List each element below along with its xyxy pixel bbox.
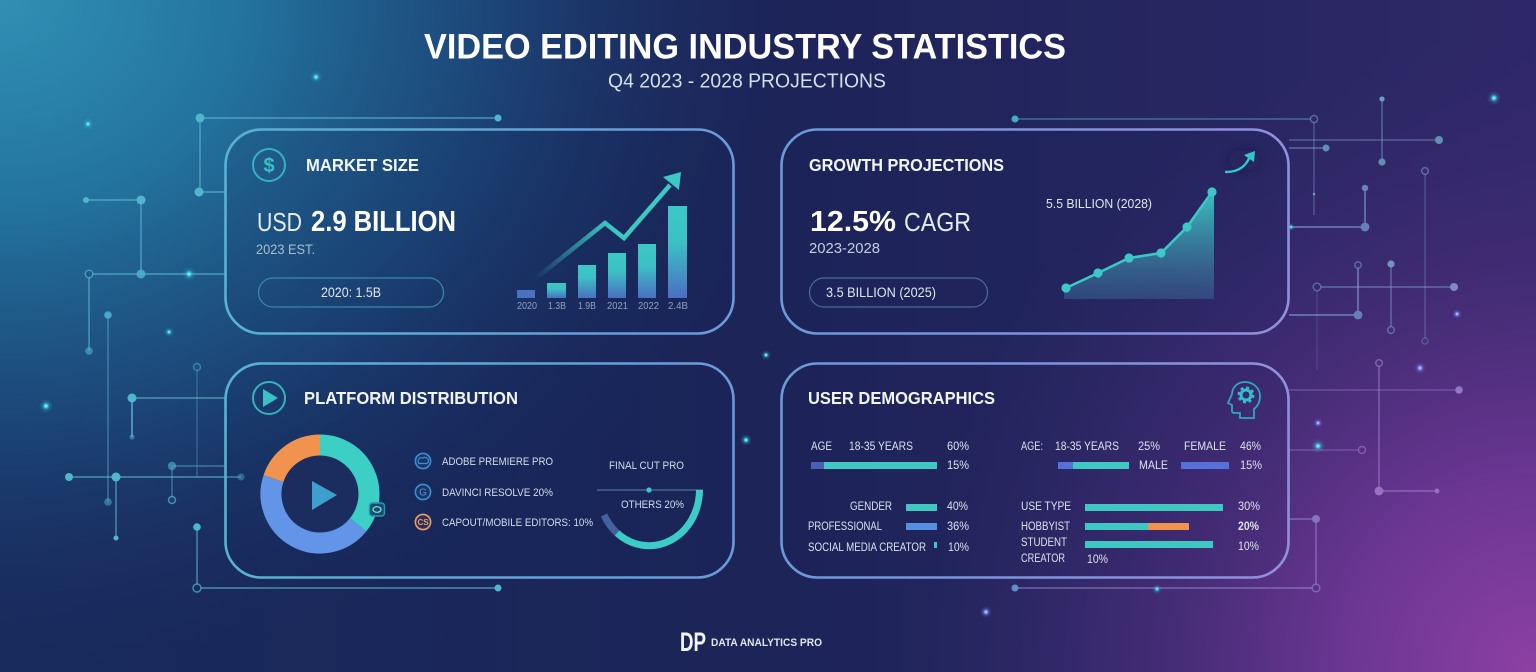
icon: head with gear (1228, 382, 1260, 418)
pill: 2020 value (258, 278, 444, 307)
legend: platforms: ADOBE PREMIERE PRO (442, 456, 553, 468)
bars: age, female and male: 46% (1240, 441, 1261, 453)
bars: use type: 10% (1087, 554, 1108, 566)
icon: dollar: $ (263, 155, 275, 177)
bars: age, female and male: 25% (1138, 441, 1160, 453)
big figure: 12.5% CAGR: 12.5% (810, 206, 896, 238)
panel: user demographics (782, 364, 1288, 578)
pill: 2025 value: 3.5 BILLION (2025) (826, 285, 936, 300)
glowing particles (39, 71, 1501, 618)
panel: platform distribution (226, 364, 734, 578)
legend: platforms: CAPOUT/MOBILE EDITORS: 10% (442, 517, 593, 529)
circuit lines right (1012, 96, 1463, 592)
legend: platforms (415, 453, 593, 530)
icon: growth arrow (1226, 150, 1260, 172)
bar chart: market growth: 2022 (638, 301, 659, 312)
legend: platforms: G (419, 488, 427, 498)
bars: age, female and male: AGE: (1021, 441, 1043, 453)
arrow: upward trend (535, 172, 681, 279)
bars: use type: 30% (1238, 501, 1260, 513)
bars: age, female and male: 18-35 YEARS (1055, 441, 1119, 453)
donut chart: platform share (271, 445, 384, 543)
legend: platforms: DAVINCI RESOLVE 20% (442, 487, 553, 499)
bar chart: market growth: 2.4B (668, 301, 688, 312)
bar chart: market growth: 1.9B (578, 301, 596, 312)
pill: 2020 value: 2020: 1.5B (321, 285, 381, 300)
bars: age and gender (808, 441, 969, 554)
footer brand (680, 627, 822, 657)
panel: growth projections (782, 130, 1288, 334)
gauge: others share (597, 487, 703, 546)
bar chart: market growth: 2021 (607, 301, 628, 312)
bar chart: market growth (517, 206, 688, 312)
heading: market size: MARKET SIZE (306, 155, 419, 175)
bars: age and gender: 40% (947, 501, 968, 513)
area chart: projected growth (1061, 187, 1217, 299)
bars: age and gender: SOCIAL MEDIA CREATOR (808, 542, 926, 554)
big figure: 12.5% CAGR (810, 206, 971, 238)
bars: age, female and male: 15% (1240, 460, 1262, 472)
bars: use type: 20% (1238, 521, 1259, 533)
label: final cut pro: FINAL CUT PRO (609, 460, 684, 472)
title: VIDEO EDITING INDUSTRY STATISTICS (424, 28, 1066, 66)
bars: age and gender: AGE (811, 441, 832, 453)
big figure: USD 2.9 billion (257, 206, 456, 238)
big figure: USD 2.9 billion: USD (257, 207, 302, 237)
gauge: others share: OTHERS 20% (621, 499, 684, 511)
bars: use type: USE TYPE (1021, 501, 1071, 513)
big figure: 12.5% CAGR: CAGR (904, 207, 971, 237)
label: 2028 value: 5.5 BILLION (2028) (1046, 196, 1152, 211)
bars: use type (1021, 501, 1260, 566)
circuit lines left (65, 114, 502, 592)
subtitle: Q4 2023 - 2028 PROJECTIONS (608, 70, 886, 92)
bars: age and gender: PROFESSIONAL (808, 521, 882, 533)
legend: platforms: CS (417, 518, 429, 527)
bars: use type: HOBBYIST (1021, 521, 1070, 533)
icon: dollar (253, 149, 285, 181)
footer brand: DP (680, 627, 706, 657)
bar chart: market growth: 1.3B (548, 301, 566, 312)
bars: age and gender: 10% (948, 542, 969, 554)
panel: market size (226, 130, 734, 334)
icon: play (253, 382, 285, 414)
heading: growth projections: GROWTH PROJECTIONS (809, 155, 1004, 175)
note: period: 2023-2028 (809, 241, 880, 257)
bars: age, female and male: FEMALE (1184, 441, 1226, 453)
bars: age and gender: 36% (947, 521, 969, 533)
big figure: USD 2.9 billion: 2.9 BILLION (311, 206, 456, 238)
heading: platform distribution: PLATFORM DISTRIBUTION (304, 388, 518, 408)
bars: age, female and male (1021, 441, 1262, 472)
bars: use type: 10% (1238, 541, 1259, 553)
bars: age, female and male: MALE (1139, 460, 1168, 472)
bars: use type: STUDENT (1021, 537, 1067, 549)
footer brand: DATA ANALYTICS PRO (711, 637, 822, 649)
bars: age and gender: 60% (947, 441, 969, 453)
bars: age and gender: 15% (947, 460, 969, 472)
heading: user demographics: USER DEMOGRAPHICS (808, 388, 995, 408)
pill: 2025 value (810, 278, 988, 307)
note: 2023 est: 2023 EST. (256, 241, 315, 257)
bar chart: market growth: 2020 (517, 301, 537, 312)
bars: age and gender: 18-35 YEARS (849, 441, 913, 453)
bars: use type: CREATOR (1021, 553, 1065, 565)
bars: age and gender: GENDER (850, 501, 892, 513)
